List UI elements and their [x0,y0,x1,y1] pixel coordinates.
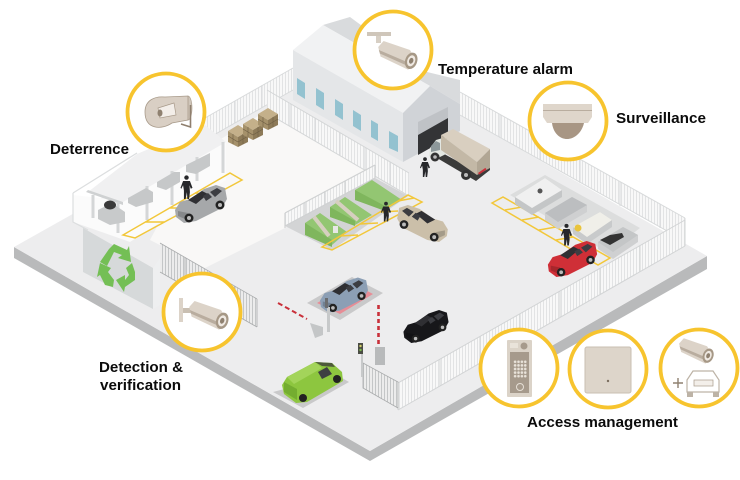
parking pad: blue car [307,277,383,320]
bin three [573,212,612,244]
bin four [598,227,638,259]
traffic light [358,343,363,377]
people [180,157,572,246]
shed roof [88,125,226,202]
icon: door station [507,340,532,397]
icon: recycling [97,244,135,292]
gate fence [363,363,398,408]
bin two [330,197,372,225]
building [293,17,460,162]
back left fence [205,68,293,140]
car: red [548,241,597,277]
icon: horn speaker [145,96,192,127]
recycling sign [83,228,160,309]
truck [429,129,490,181]
label: deterrence: Deterrence [50,141,129,158]
bin one [305,213,347,245]
label: surveillance: Surveillance [616,110,706,127]
front fence [398,220,685,410]
cargo box [441,129,490,162]
parking zone: centre [322,195,422,250]
light yard surface [150,110,375,268]
icon: bullet camera [179,298,231,331]
parking zone: left [123,173,242,238]
icon: bullet camera [367,32,420,71]
recycling bins [510,175,640,259]
windows [297,78,398,152]
label: access management: Access management [527,414,678,431]
callout: intercom [480,330,558,406]
car: black [403,310,449,343]
chassis [437,150,490,181]
car: silver suv [175,185,227,223]
bin one [515,178,562,215]
rear roof slope [323,17,460,104]
label: detection and verification: verification [100,377,181,394]
callout: detection and verification [164,274,240,350]
bin fence [285,165,375,226]
parking zone: right [492,197,610,265]
loading door [418,107,448,135]
lower left fence [160,243,257,327]
car: beige sedan [397,205,448,242]
shed units [128,153,210,207]
icon: dome camera [543,104,592,139]
barrier post [310,298,330,338]
bin three [355,180,402,210]
barrier arm [278,303,307,319]
back right fence [460,92,685,241]
shed [73,125,226,242]
callout: temperature alarm [354,12,432,88]
long wall [293,50,403,162]
car: blue [320,277,368,313]
callout: deterrence [128,74,204,150]
left railing [73,153,137,230]
callout: reader [570,330,646,408]
roof [293,25,430,113]
cab [429,137,446,160]
label: temperature alarm: Temperature alarm [438,61,573,78]
green van [282,362,343,403]
parking pad: green van [273,375,349,408]
callout: surveillance [530,82,606,160]
callout: license plate recognition [660,330,738,406]
shed floor [73,142,226,242]
concrete base [510,175,640,253]
gable wall [403,86,460,162]
icon: access reader [585,347,631,393]
ground platform [14,90,707,461]
icon: camera plus car [673,338,719,397]
concrete surround [285,178,408,250]
label: detection and verification: Detection & [99,359,183,376]
label: detection and verification [99,359,183,394]
exit barrier [375,305,385,365]
bin two [545,197,587,229]
inner fence [267,90,409,196]
pallets [228,108,278,147]
green bins [285,165,408,250]
